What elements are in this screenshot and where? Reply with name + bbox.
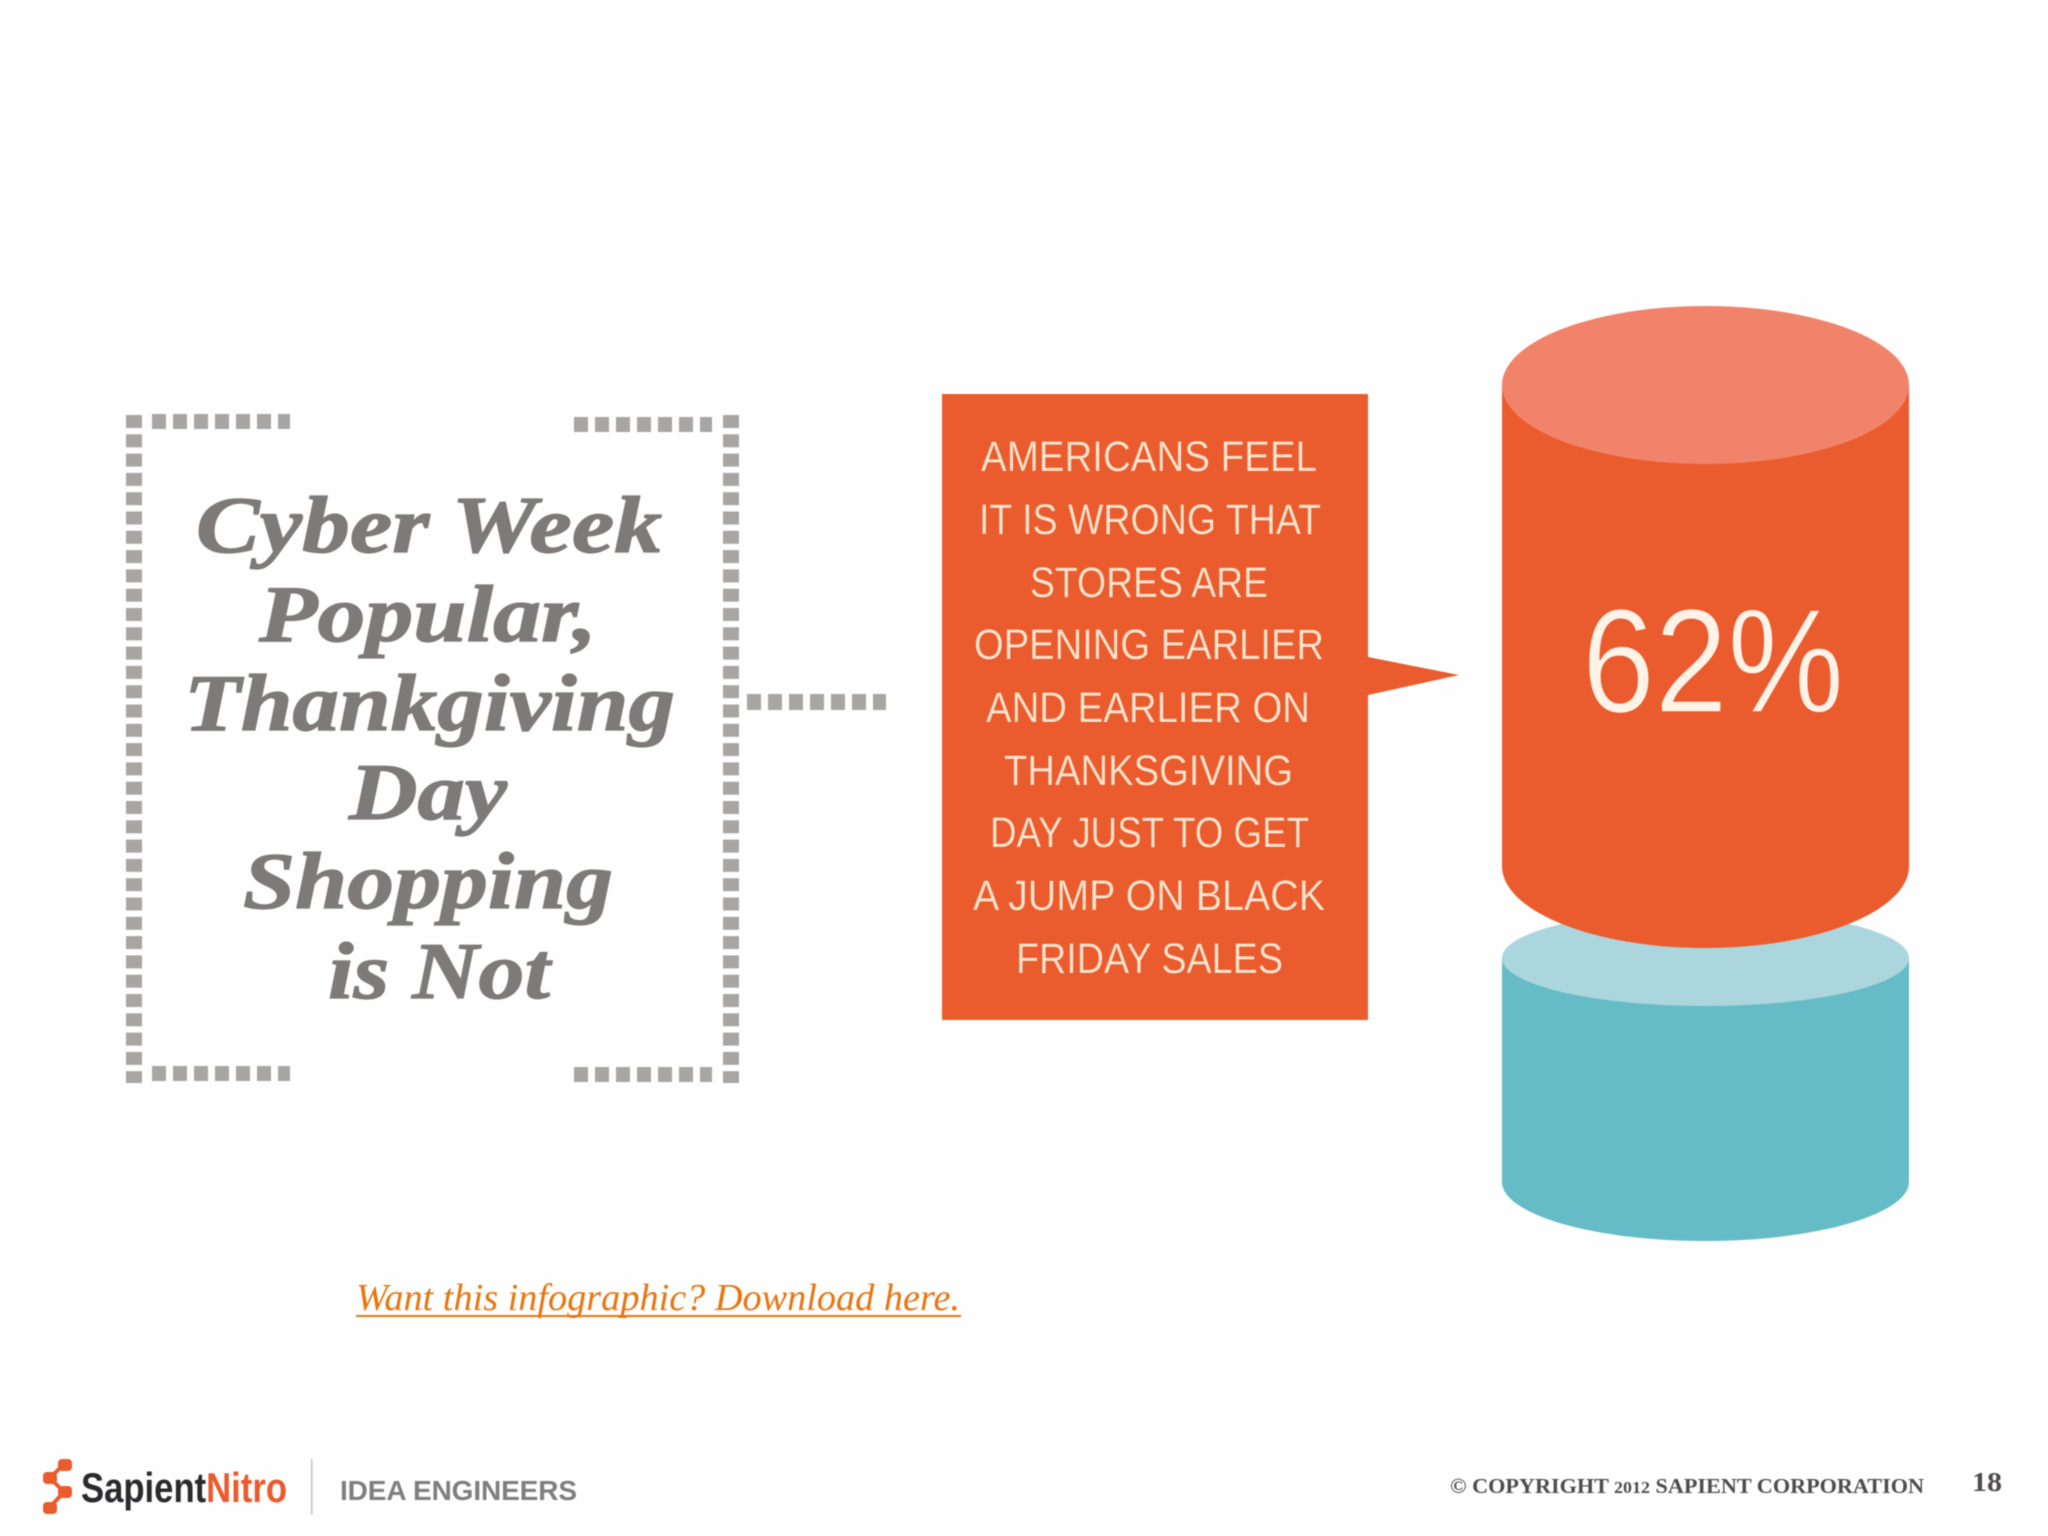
heading: Shopping bbox=[243, 838, 613, 926]
callout box with pointer bbox=[942, 394, 1459, 1020]
logo divider bbox=[311, 1459, 312, 1515]
cylinder: orange 62 percent bbox=[1502, 306, 1909, 948]
callout text: AMERICANS FEEL bbox=[981, 433, 1317, 481]
value: 62%: 62% bbox=[1582, 579, 1844, 744]
callout text: THANKSGIVING bbox=[1004, 747, 1293, 795]
heading: is Not bbox=[328, 928, 553, 1016]
heading: Cyber Week bbox=[196, 482, 662, 570]
download link: Want this infographic? Download here. bbox=[356, 1277, 960, 1319]
callout text: OPENING EARLIER bbox=[974, 621, 1324, 669]
icon: connected nodes bbox=[43, 1459, 72, 1514]
callout text: IT IS WRONG THAT bbox=[979, 496, 1321, 544]
heading: Thankgiving bbox=[184, 660, 675, 748]
callout text bbox=[973, 433, 1325, 983]
heading: Popular, bbox=[258, 571, 597, 659]
wordmark: SapientNitro bbox=[81, 1464, 287, 1511]
callout text: DAY JUST TO GET bbox=[990, 809, 1309, 857]
dotted connector bbox=[747, 694, 886, 710]
dotted frame around heading bbox=[126, 414, 739, 1083]
callout text: AND EARLIER ON bbox=[986, 684, 1310, 732]
callout text: A JUMP ON BLACK bbox=[973, 872, 1325, 920]
heading: Day bbox=[348, 749, 508, 837]
callout text: FRIDAY SALES bbox=[1016, 935, 1283, 983]
logo: SapientNitro bbox=[43, 1459, 287, 1514]
heading bbox=[184, 482, 675, 1016]
page number: 18 bbox=[1972, 1467, 2002, 1497]
copyright: © COPYRIGHT 2012 SAPIENT CORPORATION bbox=[1450, 1474, 1924, 1498]
cylinder: teal remainder bbox=[1502, 910, 1909, 1241]
tagline: IDEA ENGINEERS bbox=[340, 1475, 577, 1506]
callout text: STORES ARE bbox=[1030, 559, 1268, 607]
